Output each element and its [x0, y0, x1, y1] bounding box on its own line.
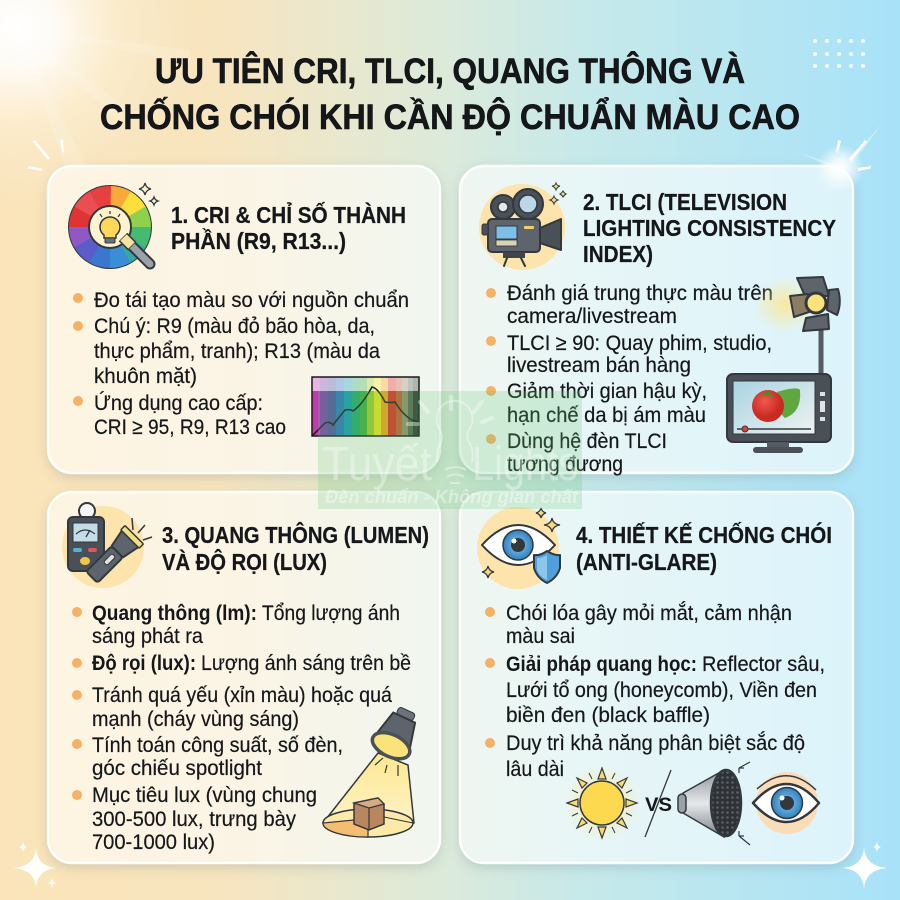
bullet list: Giải pháp quang học: [506, 652, 697, 676]
heading: PHẦN (R9, R13...) [171, 227, 346, 254]
watermark: Tuyết Lights logo: Đèn chuẩn - Không gian chất [325, 487, 579, 507]
watermark: Tuyết Lights logo: Lights [472, 438, 578, 491]
bullet list: Đánh giá trung thực màu trên [507, 281, 773, 305]
bullet list: Ứng dụng cao cấp: [94, 390, 263, 415]
heading [583, 189, 836, 267]
spectrum chart [312, 377, 419, 436]
vs label: VS [645, 795, 672, 816]
bullet list: khuôn mặt) [94, 364, 197, 388]
vs label [645, 770, 672, 837]
bullet list: Tránh quá yếu (xỉn màu) hoặc quá [92, 683, 392, 707]
bullet list: lâu dài [506, 757, 564, 781]
bullet list [73, 288, 409, 439]
bullet list: 700-1000 lux) [92, 830, 215, 854]
heading [171, 200, 406, 254]
bullet list [72, 601, 411, 854]
heading: (ANTI-GLARE) [576, 549, 717, 575]
background glare: sun top left [0, 0, 203, 213]
icon: colour wheel with bulb and magnifier [68, 183, 158, 269]
bullet list: Quang thông (lm): [92, 601, 257, 625]
watermark: Tuyết Lights logo [318, 391, 582, 509]
bullet list: Lưới tổ ong (honeycomb), Viền đen [506, 678, 817, 702]
heading: VÀ ĐỘ RỌI (LUX) [162, 548, 327, 575]
decorative dot grid [813, 39, 865, 68]
bullet list: 300-500 lux, trưng bày [92, 807, 296, 831]
bullet list: góc chiếu spotlight [92, 756, 262, 780]
bullet list [485, 600, 825, 781]
icon: film camera [479, 183, 566, 270]
heading: INDEX) [583, 241, 653, 267]
bullet list: thực phẩm, tranh); R13 (màu da [94, 339, 380, 363]
bullet list: Dùng hệ đèn TLCI [507, 429, 667, 453]
panel: CRI [48, 166, 440, 473]
heading: LIGHTING CONSISTENCY [583, 215, 836, 241]
bullet list: Chú ý: R9 (màu đỏ bão hòa, da, [94, 314, 375, 338]
bullet list: hạn chế da bị ám màu [507, 403, 706, 427]
bullet list: tương đương [507, 452, 623, 476]
bullet list: sáng phát ra [92, 624, 203, 648]
bullet list [486, 281, 773, 476]
icon: sun [564, 765, 640, 841]
bullet list: mạnh (cháy vùng sáng) [92, 707, 299, 731]
bullet list: Độ rọi (lux): [92, 651, 196, 675]
bullet list: CRI ≥ 95, R9, R13 cao [94, 415, 286, 439]
illustration: sun versus honeycomb and calm eye [564, 762, 819, 845]
heading: 4. THIẾT KẾ CHỐNG CHÓI [576, 521, 832, 548]
heading [162, 521, 429, 575]
bullet list: Giảm thời gian hậu kỳ, [507, 379, 707, 403]
icon: watermark bulb [408, 397, 492, 483]
bullet list: Lượng ánh sáng trên bề [201, 651, 411, 675]
title: ƯU TIÊN CRI, TLCI, QUANG THÔNG VÀ [155, 51, 745, 91]
bullet list: Duy trì khả năng phân biệt sắc độ [506, 730, 805, 755]
title [100, 51, 800, 137]
panel: lumen and lux [48, 492, 440, 863]
icon: eye [753, 772, 819, 834]
illustration: spotlight on box [323, 702, 426, 837]
bullet list: biền đen (black baffle) [506, 703, 710, 727]
bullet list: Mục tiêu lux (vùng chung [92, 783, 317, 807]
panel: TLCI [460, 166, 853, 476]
icon: lux meter and flashlight [62, 503, 152, 588]
bullet list: TLCI ≥ 90: Quay phim, studio, [507, 331, 772, 355]
panel: anti-glare [460, 492, 853, 863]
title: CHỐNG CHÓI KHI CẦN ĐỘ CHUẨN MÀU CAO [100, 97, 800, 137]
illustration: spotlight and monitor with tomato [727, 277, 840, 453]
icon: honeycomb snoot [678, 762, 750, 845]
watermark: Tuyết Lights logo: Tuyết [322, 438, 432, 491]
heading: 2. TLCI (TELEVISION [583, 189, 787, 215]
top-right sparkle glow over card corner [816, 144, 864, 192]
heading: 1. CRI & CHỈ SỐ THÀNH [171, 200, 406, 228]
heading: 3. QUANG THÔNG (LUMEN) [162, 521, 429, 548]
icon: eye with shield [477, 507, 560, 589]
bullet list: Reflector sâu, [702, 652, 825, 676]
bullet list: livestream bán hàng [507, 353, 691, 377]
bullet list: Chói lóa gây mỏi mắt, cảm nhận [506, 600, 792, 625]
bullet list: camera/livestream [507, 304, 677, 328]
bullet list: Tổng lượng ánh [262, 601, 400, 625]
heading [576, 521, 832, 575]
bullet list: màu sai [506, 624, 575, 648]
bullet list: Đo tái tạo màu so với nguồn chuẩn [94, 288, 409, 312]
bullet list: Tính toán công suất, số đèn, [92, 733, 343, 757]
